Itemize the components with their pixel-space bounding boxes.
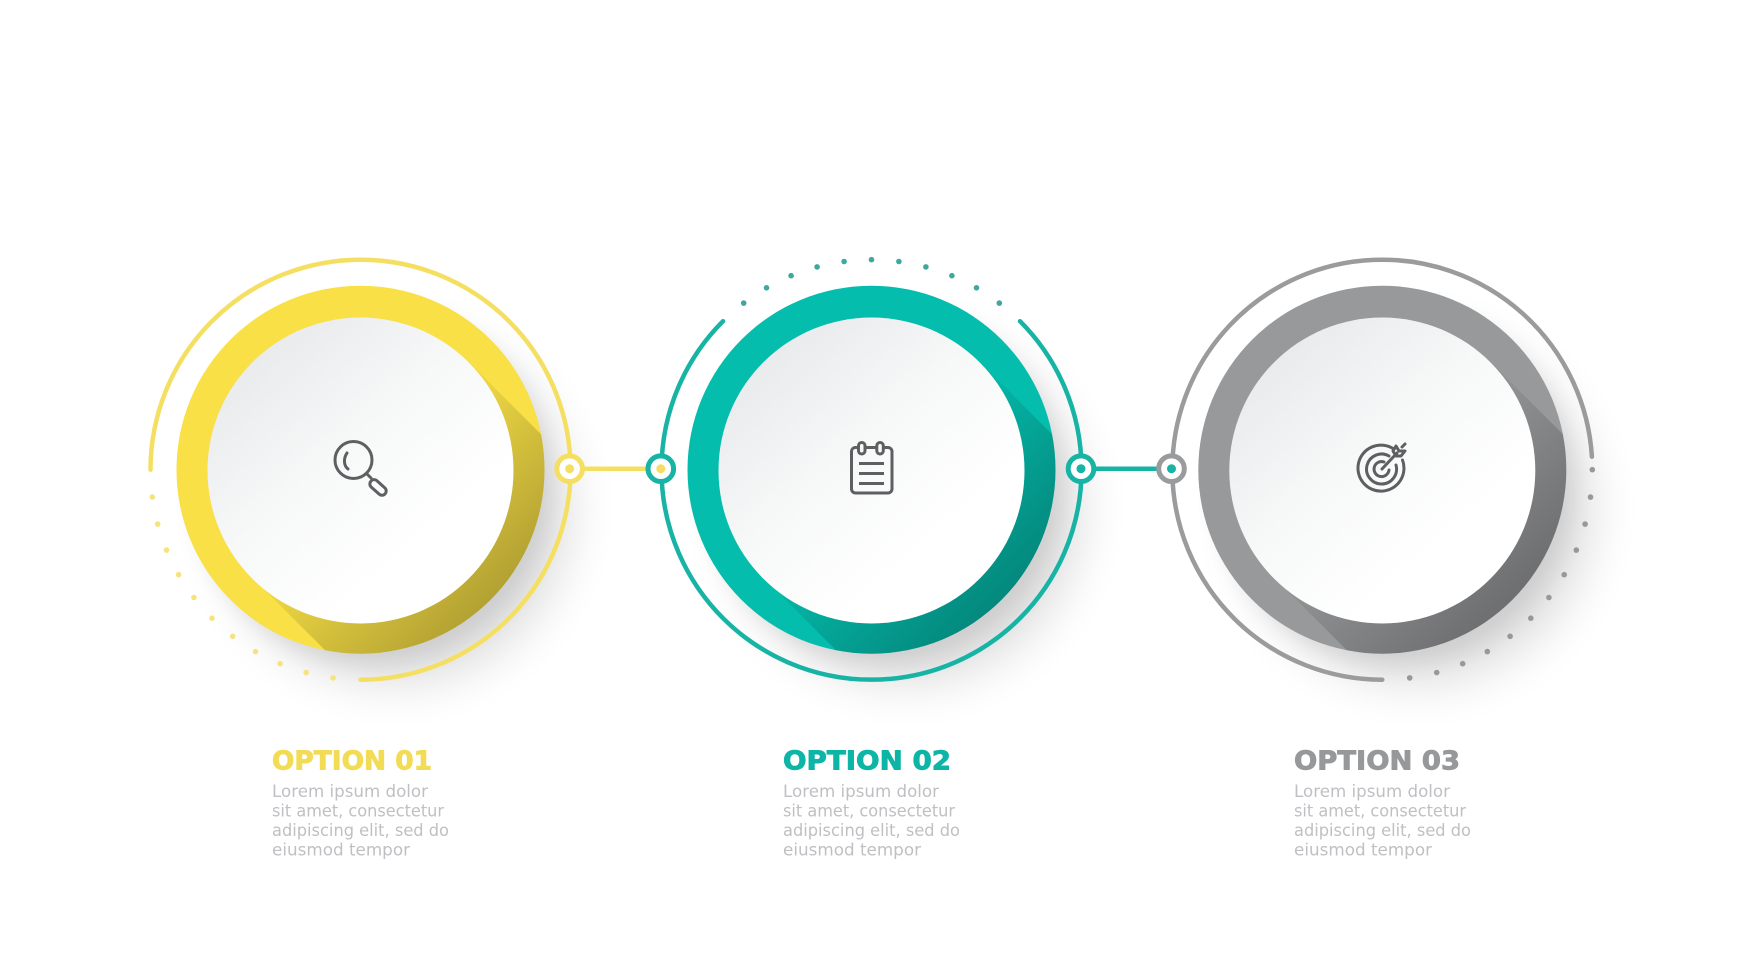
teal ring [688,286,1056,654]
body copy: Lorem ipsum dolor [272,782,428,801]
outer arc line [150,260,570,680]
white disc [718,318,1024,624]
icon: target with arrow [1358,444,1405,491]
drop shadow [194,308,570,684]
node: teal with yellow dot [648,456,674,482]
node: yellow [557,456,582,482]
icon: notepad [851,442,892,493]
body copy: Lorem ipsum dolor [1294,782,1450,801]
text block: option 01 [272,746,449,860]
body copy [783,782,960,860]
grey ring [1198,286,1566,654]
text block: option 02 [783,746,960,860]
drop shadow [706,308,1082,684]
panel: option 03 circle [1170,258,1606,697]
body copy: adipiscing elit, sed do [783,821,960,840]
icon: magnifying glass [335,442,388,497]
panel: option 02 circle [660,256,1095,697]
node: teal [1068,456,1094,482]
body copy: eiusmod tempor [783,840,921,860]
ring long shadow [780,370,1056,654]
dotted arc [741,257,1002,306]
body copy [1294,782,1471,860]
connector: option 01 to option 02 [557,456,674,482]
dotted arc [150,494,336,681]
body copy: Lorem ipsum dolor [783,782,939,801]
body copy: sit amet, consectetur [783,802,955,820]
outer arc line [1172,260,1592,680]
drop shadow [1216,308,1592,684]
body copy: adipiscing elit, sed do [1294,821,1471,840]
body copy: eiusmod tempor [1294,840,1432,860]
heading: OPTION 01 [272,746,432,776]
connector line [1081,466,1172,471]
panel: option 01 circle [148,258,584,697]
body copy [272,782,449,860]
node: grey with teal dot [1159,456,1184,482]
body copy: eiusmod tempor [272,840,410,860]
outer arc line [662,321,1082,680]
body copy: adipiscing elit, sed do [272,821,449,840]
body copy: sit amet, consectetur [272,802,444,820]
white disc [1229,318,1535,624]
text block: option 03 [1294,746,1471,860]
connector: option 02 to option 03 [1068,456,1184,482]
heading: OPTION 02 [783,746,951,776]
body copy: sit amet, consectetur [1294,802,1466,820]
dotted arc [1407,467,1595,681]
ring long shadow [266,362,544,654]
white disc [208,318,514,624]
ring long shadow [1297,384,1566,654]
yellow ring [176,286,544,654]
heading: OPTION 03 [1294,746,1460,776]
connector line [570,466,661,471]
